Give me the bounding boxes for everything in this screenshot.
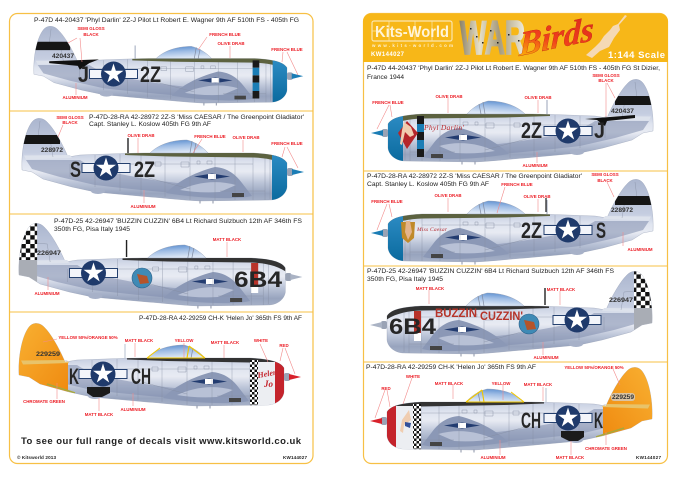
colour callouts: right sheet: FRENCH BLUE <box>501 182 533 187</box>
titles: right sheet: P-47D-28-RA 42-29259 CH-K 'Helen Jo' 365th FS 9th AF <box>366 364 536 371</box>
aircraft R3: Buzzin Cuzzin right side: BUZZIN <box>435 306 477 320</box>
header scale text: 1:144 Scale <box>608 50 665 61</box>
titles: left sheet: P-47D-25 42-26947 'BUZZIN CUZZIN' 6B4 Lt Richard Sulzbuch 12th AF 346th FS <box>54 218 302 225</box>
aircraft R4: Helen Jo right side: K <box>594 408 603 433</box>
colour callouts: left sheet: ALUMINIUM <box>130 204 156 209</box>
colour callouts: right sheet: OLIVE DRAB <box>434 193 462 198</box>
aircraft R3: Buzzin Cuzzin right side: 226947 <box>609 297 633 304</box>
aircraft L3: Buzzin Cuzzin left side: 6B4 <box>234 267 283 292</box>
colour callouts: right sheet: CHROMATE GREEN <box>585 446 627 451</box>
colour callouts: left sheet: ALUMINIUM <box>62 95 88 100</box>
aircraft R2: Miss Caesar right side: S <box>596 218 606 243</box>
colour callouts: right sheet: YELLOW 50%/ORANGE 50% <box>564 365 624 370</box>
colour callouts: right sheet: ALUMINIUM <box>627 247 653 252</box>
aircraft L2: Miss Caesar left side: 2Z <box>134 157 155 182</box>
colour callouts: left sheet: MATT BLACK <box>125 338 154 343</box>
colour callouts: left sheet: OLIVE DRAB <box>217 41 245 46</box>
colour callouts: left sheet: MATT BLACK <box>213 237 242 242</box>
titles: left sheet: Capt. Stanley L. Koslow 405th FG 9th AF <box>89 121 211 128</box>
colour callouts: left sheet: ALUMINIUM <box>120 407 146 412</box>
aircraft L4: Helen Jo left side: K <box>69 364 79 389</box>
header logo: Kits-World: www.kits-world.com <box>371 43 453 48</box>
colour callouts: left sheet: SEMI GLOSS <box>77 26 105 31</box>
colour callouts: right sheet: BLACK <box>597 178 614 183</box>
aircraft R3: Buzzin Cuzzin right side: CUZZIN' <box>480 309 523 323</box>
colour callouts: left sheet: OLIVE DRAB <box>127 133 155 138</box>
colour callouts: right sheet: MATT BLACK <box>416 286 445 291</box>
product code: left sheet: KW144027 <box>283 455 307 460</box>
aircraft R1: Phyl Darlin right side: 2Z <box>521 118 542 143</box>
colour callouts: right sheet: MATT BLACK <box>547 287 576 292</box>
aircraft L3: Buzzin Cuzzin left side <box>16 222 302 308</box>
colour callouts: left sheet: FRENCH BLUE <box>271 141 303 146</box>
titles: right sheet: 350th FG, Pisa Italy 1945 <box>367 276 444 283</box>
aircraft R2: Miss Caesar right side: 2Z <box>521 218 542 243</box>
colour callouts: right sheet <box>371 73 653 460</box>
colour callouts: left sheet: SEMI GLOSS <box>56 115 84 120</box>
colour callouts: right sheet: MATT BLACK <box>524 382 553 387</box>
aircraft L4: Helen Jo left side: 229259 <box>36 351 60 358</box>
colour callouts: left sheet: YELLOW 50%/ORANGE 50% <box>58 335 118 340</box>
aircraft R3: Buzzin Cuzzin right side: 6B4 <box>389 314 437 339</box>
aircraft L1: Phyl Darlin left side <box>32 26 303 105</box>
aircraft L4: Helen Jo left side <box>16 320 301 408</box>
header logo: Kits-World: KW144027 <box>371 52 405 58</box>
aircraft L4: Helen Jo left side: Helen <box>256 368 279 380</box>
colour callouts: left sheet: FRENCH BLUE <box>194 134 226 139</box>
colour callouts: right sheet: SEMI GLOSS <box>592 73 620 78</box>
colour callouts: right sheet: ALUMINIUM <box>522 163 548 168</box>
left decal sheet panel <box>10 14 313 464</box>
website call to action: To see our full range of decals visit www.kitsworld.co.uk <box>21 436 302 447</box>
colour callouts: left sheet: BLACK <box>83 32 100 37</box>
colour callouts: left sheet: WHITE <box>254 338 268 343</box>
aircraft L1: Phyl Darlin left side: 2Z <box>140 62 161 87</box>
aircraft L1: Phyl Darlin left side: J <box>78 62 89 87</box>
aircraft L4: Helen Jo left side: CH <box>131 364 151 389</box>
titles: left sheet: P-47D-28-RA 42-29259 CH-K 'Helen Jo' 365th FS 9th AF <box>139 315 302 322</box>
aircraft R1: Phyl Darlin right side: 420437 <box>611 108 634 115</box>
titles: right sheet: P-47D 44-20437 'Phyl Darlin' 2Z-J Pilot Lt Robert E. Wagner 9th AF 510th FS - 405th FG St Dizier, <box>367 65 660 72</box>
titles: left sheet <box>34 17 304 322</box>
colour callouts: left sheet: MATT BLACK <box>85 412 114 417</box>
colour callouts: right sheet: SEMI GLOSS <box>591 172 619 177</box>
titles: left sheet: P-47D-28-RA 42-28972 2Z-S 'Miss CAESAR / The Greenpoint Gladiator' <box>89 114 304 121</box>
colour callouts: left sheet: ALUMINIUM <box>34 291 60 296</box>
colour callouts: left sheet: RED <box>279 343 289 348</box>
colour callouts: right sheet: BLACK <box>598 78 615 83</box>
aircraft R4: Helen Jo right side: CH <box>521 408 541 433</box>
colour callouts: left sheet: CHROMATE GREEN <box>23 399 65 404</box>
aircraft R4: Helen Jo right side <box>370 364 655 452</box>
aircraft L2: Miss Caesar left side: S <box>70 157 81 182</box>
aircraft L3: Buzzin Cuzzin left side: 226947 <box>37 250 61 257</box>
colour callouts: left sheet: BLACK <box>62 120 79 125</box>
aircraft R2: Miss Caesar right side <box>371 179 655 264</box>
colour callouts: right sheet: FRENCH BLUE <box>372 100 404 105</box>
header logo: Kits-World: Kits-World <box>375 24 449 41</box>
copyright: © Kitsworld 2013 <box>17 454 56 460</box>
colour callouts: left sheet <box>23 26 303 417</box>
colour callouts: right sheet: OLIVE DRAB <box>524 95 552 100</box>
colour callouts: right sheet: YELLOW <box>492 381 511 386</box>
colour callouts: right sheet: RED <box>381 386 391 391</box>
colour callouts: left sheet: FRENCH BLUE <box>271 47 303 52</box>
aircraft L2: Miss Caesar left side: 228972 <box>41 147 63 154</box>
header logo: War Birds: Birds <box>518 10 594 64</box>
header logo: War Birds <box>460 10 627 64</box>
aircraft R1: Phyl Darlin right side: Phyl Darlin' <box>423 123 464 132</box>
header logo: War Birds: WAR <box>460 11 525 64</box>
aircraft R4: Helen Jo right side: 229259 <box>612 394 634 401</box>
colour callouts: left sheet: OLIVE DRAB <box>232 135 260 140</box>
right sheet dividers <box>364 171 668 362</box>
colour callouts: right sheet: ALUMINIUM <box>480 455 506 460</box>
colour callouts: right sheet: OLIVE DRAB <box>435 94 463 99</box>
colour callouts: right sheet: OLIVE DRAB <box>523 194 551 199</box>
titles: right sheet: P-47D-28-RA 42-28972 2Z-S 'Miss CAESAR / The Greenpoint Gladiator' <box>367 173 582 180</box>
titles: left sheet: P-47D 44-20437 'Phyl Darlin' 2Z-J Pilot Lt Robert E. Wagner 9th AF 510th FS - 405th FG <box>34 17 299 24</box>
aircraft R1: Phyl Darlin right side: J <box>594 118 605 143</box>
aircraft L4: Helen Jo left side: Jo <box>263 379 274 389</box>
aircraft R1: Phyl Darlin right side <box>371 79 655 164</box>
colour callouts: right sheet: ALUMINIUM <box>533 355 559 360</box>
colour callouts: right sheet: WHITE <box>406 374 420 379</box>
titles: left sheet: 350th FG, Pisa Italy 1945 <box>54 226 131 233</box>
titles: right sheet <box>366 65 660 371</box>
titles: right sheet: France 1944 <box>367 74 405 81</box>
colour callouts: left sheet: MATT BLACK <box>211 340 240 345</box>
right sheet header band <box>363 14 668 62</box>
colour callouts: left sheet: FRENCH BLUE <box>209 32 241 37</box>
aircraft L1: Phyl Darlin left side: 420437 <box>52 53 74 60</box>
aircraft L2: Miss Caesar left side <box>20 118 304 204</box>
product code: right sheet: KW144027 <box>636 455 661 460</box>
colour callouts: right sheet: MATT BLACK <box>556 455 585 460</box>
colour callouts: left sheet: YELLOW <box>175 338 194 343</box>
header logo: Kits-World <box>371 21 453 58</box>
titles: right sheet: Capt. Stanley L. Koslow 405th FG 9th AF <box>367 181 489 188</box>
colour callouts: right sheet: MATT BLACK <box>435 381 464 386</box>
right decal sheet panel <box>364 14 668 464</box>
aircraft R2: Miss Caesar right side: 228972 <box>611 207 633 214</box>
aircraft R3: Buzzin Cuzzin right side <box>370 270 655 356</box>
titles: right sheet: P-47D-25 42-26947 'BUZZIN CUZZIN' 6B4 Lt Richard Sulzbuch 12th AF 346th FS <box>367 268 614 275</box>
left sheet dividers <box>10 111 313 312</box>
colour callouts: right sheet: FRENCH BLUE <box>371 199 403 204</box>
aircraft R2: Miss Caesar right side: Miss Caesar <box>416 227 448 233</box>
